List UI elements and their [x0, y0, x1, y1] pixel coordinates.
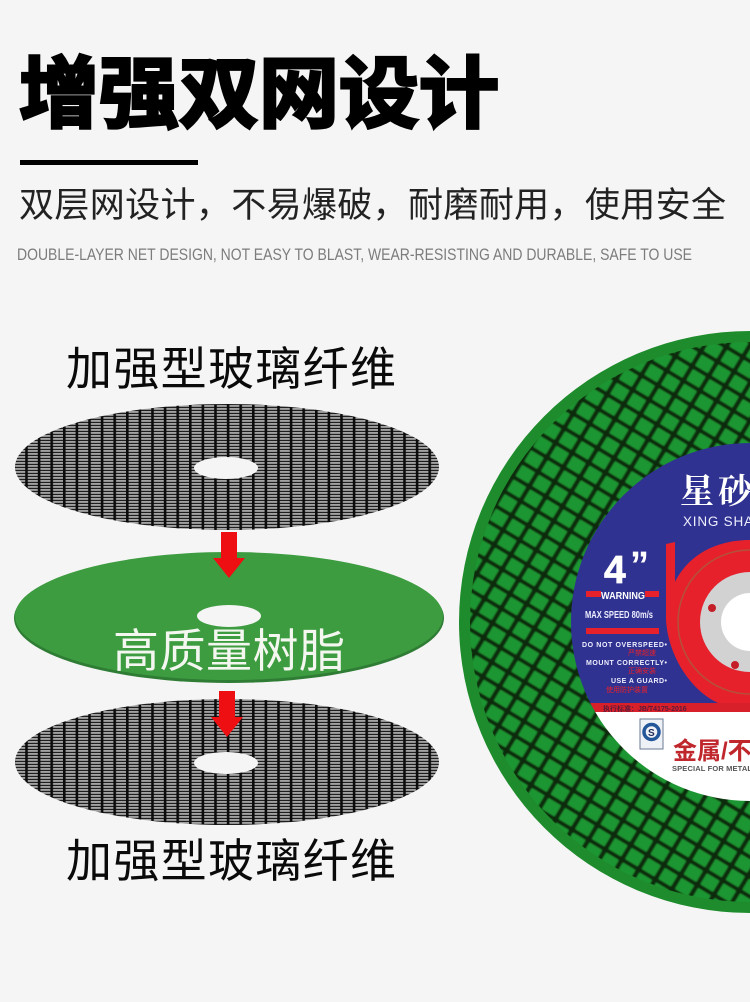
red swoosh	[666, 540, 750, 703]
bottom fiberglass mesh disc	[15, 699, 439, 825]
center ring	[700, 572, 750, 672]
Q certification mark	[640, 719, 663, 749]
disc label: USE A GUARD•	[611, 678, 668, 685]
disc label: MOUNT CORRECTLY•	[586, 660, 668, 667]
top fiberglass mesh disc	[15, 404, 439, 530]
disc label: 使用防护装置	[606, 685, 648, 694]
size: 4	[604, 549, 626, 592]
standard band	[585, 703, 750, 712]
title: 增强双网设计	[19, 50, 499, 138]
max speed: MAX SPEED 80m/s	[585, 610, 653, 621]
disc label: 执行标准：JB/T4175-2016	[603, 704, 687, 713]
special for metal: SPECIAL FOR METAL	[672, 764, 750, 773]
heading: top fiberglass layer: 加强型玻璃纤维	[66, 343, 396, 395]
ring dots	[708, 604, 716, 612]
disc label	[571, 443, 750, 801]
metal text: 金属/不	[673, 737, 750, 765]
arrow: resin to bottom mesh	[211, 691, 243, 737]
cutting disc product	[459, 331, 750, 913]
white lower area	[595, 712, 750, 801]
disc label: 严禁超速	[628, 648, 656, 657]
arc line	[678, 550, 750, 694]
arrow: top mesh to resin	[213, 532, 245, 578]
safety lines: DO NOT OVERSPEED•	[582, 642, 668, 649]
disc label: WARNING	[601, 590, 645, 602]
heading: bottom fiberglass layer: 加强型玻璃纤维	[66, 835, 396, 887]
warning	[586, 591, 601, 597]
title underline bar	[20, 160, 198, 165]
subtitle: 双层网设计，不易爆破，耐磨耐用，使用安全	[19, 186, 726, 225]
label: resin: 高质量树脂	[113, 625, 345, 677]
disc label: 正确安装	[628, 666, 656, 675]
green resin disc	[14, 552, 444, 683]
Q certification mark: S	[648, 728, 655, 739]
disc body	[459, 331, 750, 913]
disc label: ”	[630, 545, 649, 587]
reinforcement grid	[460, 335, 750, 910]
